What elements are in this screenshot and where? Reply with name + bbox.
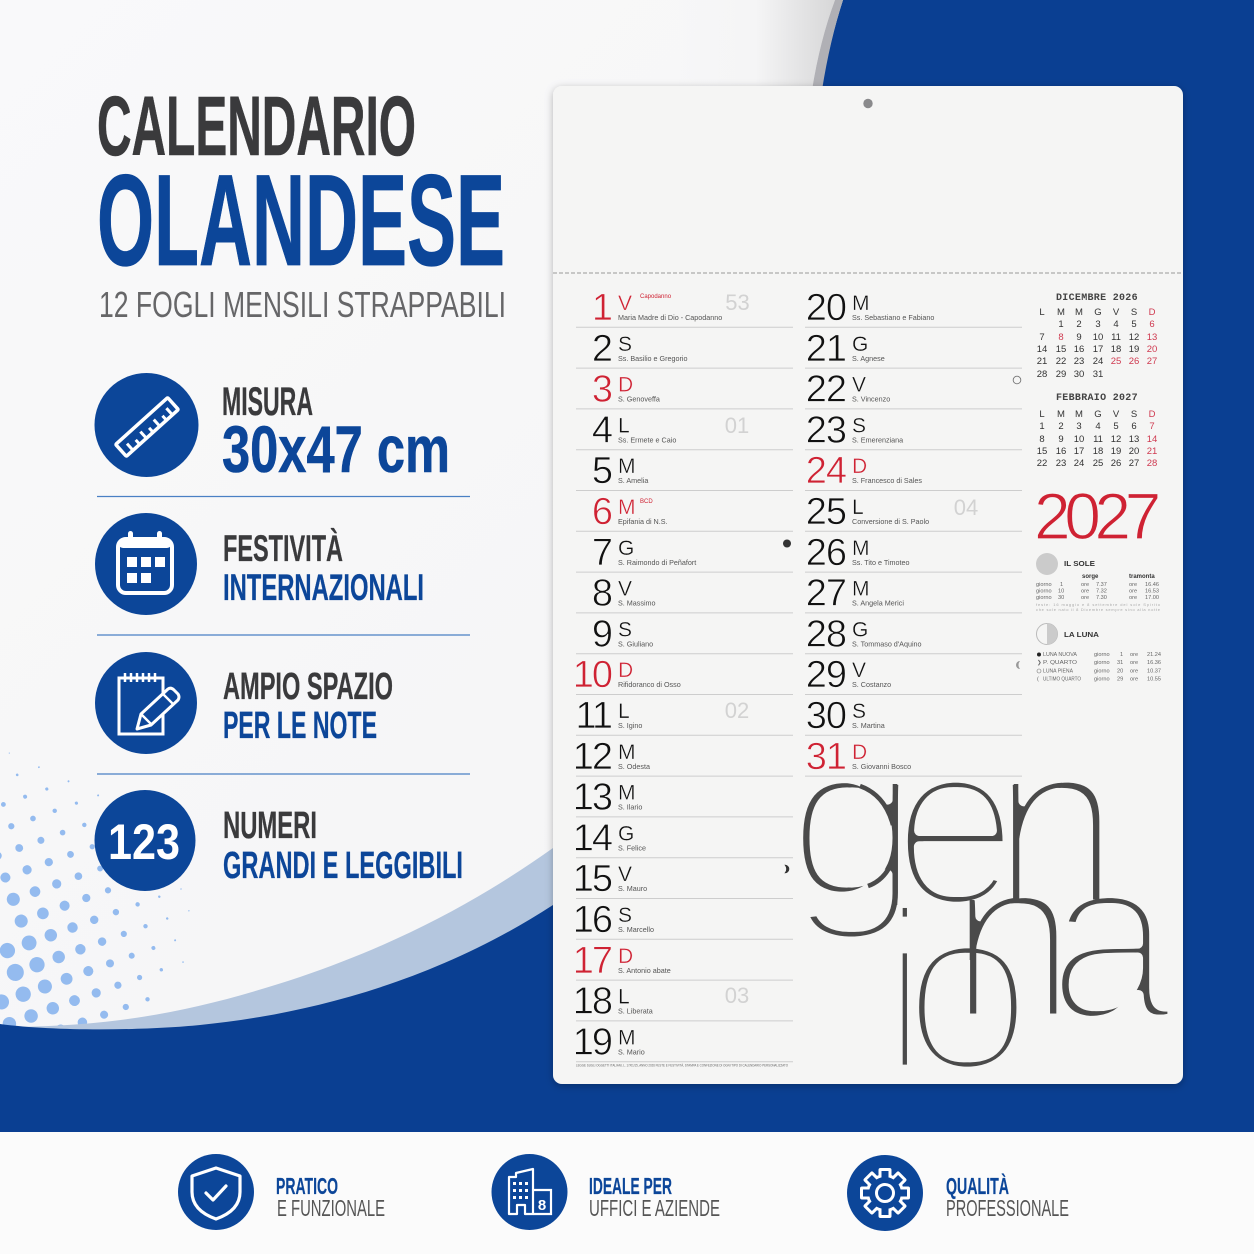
mini calendar: febbraio 2027: 10 bbox=[1074, 434, 1084, 445]
column 1: days 1-19: L bbox=[618, 986, 630, 1009]
feature: numeri: NUMERI bbox=[223, 805, 317, 847]
moon info: 21.24 bbox=[1147, 652, 1161, 658]
sun info: giorno bbox=[1036, 582, 1052, 588]
column 1: days 1-19: 17 bbox=[573, 940, 612, 982]
column 1: days 1-19: 2 bbox=[592, 328, 612, 370]
week numbers: 53 bbox=[725, 290, 750, 315]
column 1: days 1-19: G bbox=[618, 537, 634, 560]
footnote: LEGGE SUGLI OGGETTI ITALIANI, L. 17/01/15, ANNO 2026 FESTE E FESTIVITÀ, STAMPA E CONFEZIONE DI OGNI TIPO DI CALENDARIO PERSONALIZZATO bbox=[576, 1064, 788, 1068]
mini calendar: dicembre 2026: 29 bbox=[1056, 369, 1066, 380]
halftone dots bbox=[0, 714, 215, 1054]
mini calendar: dicembre 2026: S bbox=[1131, 307, 1137, 318]
sun info: 10 bbox=[1058, 588, 1064, 594]
column 1: days 1-19: S. Marcello bbox=[618, 925, 654, 934]
mini calendar: febbraio 2027: M bbox=[1075, 409, 1083, 420]
column 2: days 20-31: D bbox=[852, 741, 867, 764]
mini calendar: dicembre 2026: 6 bbox=[1149, 319, 1155, 330]
sun info: giorno bbox=[1036, 588, 1052, 594]
column 1: days 1-19: V bbox=[618, 292, 632, 315]
moon info: ore bbox=[1130, 660, 1138, 666]
moon info: 10.55 bbox=[1147, 676, 1161, 682]
mini calendar: febbraio 2027: 18 bbox=[1093, 446, 1103, 457]
mini calendar: febbraio 2027: 11 bbox=[1093, 434, 1103, 445]
mini calendar: dicembre 2026: V bbox=[1113, 307, 1120, 318]
column 2: days 20-31: 26 bbox=[806, 532, 846, 574]
column 1: days 1-19: S bbox=[618, 904, 632, 927]
feature: numeri bbox=[94, 790, 463, 891]
column 1: days 1-19: 16 bbox=[573, 899, 612, 941]
moon info: 29 bbox=[1117, 676, 1123, 682]
moon info: LA LUNA bbox=[1064, 632, 1099, 639]
sun info: che sole nato il 8 Dicembre sempre sino alla notte bbox=[1036, 607, 1161, 612]
sun info: ore bbox=[1129, 582, 1137, 588]
column 1: days 1-19: S. Liberata bbox=[618, 1007, 653, 1016]
sun info: 7.32 bbox=[1096, 588, 1107, 594]
column 1: days 1-19: S. Odesta bbox=[618, 762, 650, 771]
mini calendar: dicembre 2026: 19 bbox=[1129, 344, 1139, 355]
column 2: days 20-31: S bbox=[852, 700, 866, 723]
feature: note: AMPIO SPAZIO bbox=[223, 666, 393, 708]
sun info: 16.46 bbox=[1145, 582, 1159, 588]
year: 2027 bbox=[1034, 479, 1159, 553]
mini calendar: febbraio 2027 bbox=[1037, 393, 1157, 469]
column 1: days 1-19: S. Amelia bbox=[618, 476, 648, 485]
title: 12 FOGLI MENSILI STRAPPABILI bbox=[99, 284, 506, 325]
column 1: days 1-19: Epifania di N.S. bbox=[618, 517, 668, 526]
column 1: days 1-19: 1 bbox=[592, 287, 612, 329]
mini calendar: febbraio 2027: 9 bbox=[1058, 434, 1064, 445]
moon info: ore bbox=[1130, 668, 1138, 674]
moon info: giorno bbox=[1094, 668, 1110, 674]
column 1: days 1-19: Rifidoranco di Osso bbox=[618, 680, 681, 689]
column 1: days 1-19: S. Igino bbox=[618, 721, 642, 730]
feature: festività: INTERNAZIONALI bbox=[223, 567, 424, 608]
mini calendar: dicembre 2026: D bbox=[1149, 307, 1156, 318]
mini calendar: febbraio 2027: 17 bbox=[1074, 446, 1084, 457]
moon info: ( bbox=[1037, 676, 1039, 682]
sun info: giorno bbox=[1036, 595, 1052, 601]
column 2: days 20-31: Ss. Tito e Timoteo bbox=[852, 558, 910, 567]
sun info: 30 bbox=[1058, 595, 1064, 601]
column 1: days 1-19: 6 bbox=[592, 491, 612, 533]
column 2: days 20-31 bbox=[806, 287, 934, 778]
column 2: days 20-31: S. Tommaso d'Aquino bbox=[852, 639, 922, 648]
column 1: days 1-19: M bbox=[618, 741, 636, 764]
column 2: days 20-31: 27 bbox=[806, 573, 846, 615]
feature: misura bbox=[94, 373, 450, 486]
column 1: days 1-19: 9 bbox=[592, 613, 612, 655]
column 1: days 1-19: S. Ilario bbox=[618, 803, 642, 812]
mini calendar: dicembre 2026: G bbox=[1094, 307, 1102, 318]
feature: festività: FESTIVITÀ bbox=[223, 528, 343, 569]
column 1: days 1-19: D bbox=[618, 659, 633, 682]
week numbers: 04 bbox=[954, 495, 978, 520]
mini calendar: febbraio 2027: 7 bbox=[1149, 421, 1155, 432]
title: OLANDESE bbox=[97, 147, 505, 293]
column 1: days 1-19: S. Genoveffa bbox=[618, 395, 660, 404]
column 1: days 1-19: 12 bbox=[573, 736, 612, 778]
column 1: days 1-19: 5 bbox=[592, 450, 612, 492]
column 1: days 1-19: Maria Madre di Dio - Capodanno bbox=[618, 313, 722, 322]
mini calendar: febbraio 2027: 28 bbox=[1147, 458, 1157, 469]
column 2: days 20-31: S. Emerenziana bbox=[852, 435, 903, 444]
mini calendar: dicembre 2026: 30 bbox=[1074, 369, 1084, 380]
month name: gennaio: e bbox=[890, 691, 1021, 956]
moon info: giorno bbox=[1094, 660, 1110, 666]
mini calendar: dicembre 2026: 25 bbox=[1111, 356, 1121, 367]
icon: ruler bbox=[94, 373, 198, 477]
bottom item: uffici: UFFICI E AZIENDE bbox=[589, 1195, 720, 1221]
column 2: days 20-31: S. Vincenzo bbox=[852, 395, 890, 404]
mini calendar: febbraio 2027: 1 bbox=[1039, 421, 1045, 432]
month name: gennaio: n bbox=[946, 807, 1079, 1069]
column 1: days 1-19: M bbox=[618, 1026, 636, 1049]
bottom item: pratico: PRATICO bbox=[276, 1173, 338, 1199]
mini calendar: febbraio 2027: 8 bbox=[1039, 434, 1045, 445]
mini calendar: febbraio 2027: 24 bbox=[1074, 458, 1084, 469]
moon info: 16.36 bbox=[1147, 660, 1161, 666]
column 2: days 20-31: G bbox=[852, 333, 868, 356]
mini calendar: febbraio 2027: G bbox=[1094, 409, 1102, 420]
sun info: tramonta bbox=[1129, 574, 1155, 580]
mini calendar: dicembre 2026: 24 bbox=[1093, 356, 1103, 367]
column 1: days 1-19: M bbox=[618, 496, 636, 519]
column 1: days 1-19: 19 bbox=[573, 1021, 612, 1063]
column 1: days 1-19: S. Antonio abate bbox=[618, 966, 671, 975]
mini calendar: dicembre 2026: 12 bbox=[1129, 332, 1139, 343]
month name: gennaio: o bbox=[900, 856, 1035, 1120]
mini calendar: dicembre 2026: 9 bbox=[1076, 332, 1082, 343]
mini calendar: febbraio 2027: 22 bbox=[1037, 458, 1047, 469]
column 2: days 20-31: M bbox=[852, 292, 870, 315]
column 1: days 1-19: 18 bbox=[573, 981, 612, 1023]
month name: gennaio: a bbox=[1045, 806, 1176, 1069]
mini calendar: dicembre 2026: DICEMBRE 2026 bbox=[1056, 293, 1138, 304]
mini calendar: febbraio 2027: V bbox=[1113, 409, 1120, 420]
mini calendar: febbraio 2027: M bbox=[1057, 409, 1065, 420]
title: CALENDARIO bbox=[97, 79, 416, 173]
mini calendar: dicembre 2026: 20 bbox=[1147, 344, 1157, 355]
mini calendar: dicembre 2026: 3 bbox=[1095, 319, 1101, 330]
column 2: days 20-31: M bbox=[852, 578, 870, 601]
mini calendar: dicembre 2026: 13 bbox=[1147, 332, 1157, 343]
column 1: days 1-19: 4 bbox=[592, 409, 613, 451]
column 1: days 1-19: 8 bbox=[592, 573, 612, 615]
column 2: days 20-31: S. Agnese bbox=[852, 354, 885, 363]
bottom item: uffici: IDEALE PER bbox=[589, 1173, 672, 1199]
mini calendar: dicembre 2026: 23 bbox=[1074, 356, 1084, 367]
column 1: days 1-19: 10 bbox=[573, 654, 612, 696]
bottom item: pratico bbox=[178, 1154, 385, 1230]
grey edge bbox=[812, 0, 843, 90]
column 1: days 1-19: S bbox=[618, 333, 632, 356]
mini calendar: febbraio 2027: 25 bbox=[1093, 458, 1103, 469]
feature: misura: MISURA bbox=[222, 380, 313, 424]
mini calendar: febbraio 2027: 15 bbox=[1037, 446, 1047, 457]
mini calendar: dicembre 2026: 5 bbox=[1131, 319, 1137, 330]
column 1: days 1-19: V bbox=[618, 863, 632, 886]
column 1: days 1-19: S. Felice bbox=[618, 843, 646, 852]
mini calendar: febbraio 2027: 6 bbox=[1131, 421, 1137, 432]
sun info: 1 bbox=[1060, 582, 1063, 588]
column 2: days 20-31: S. Giovanni Bosco bbox=[852, 762, 911, 771]
sun info: IL SOLE bbox=[1064, 561, 1095, 568]
column 2: days 20-31: S. Costanzo bbox=[852, 680, 891, 689]
moon info: LUNA NUOVA bbox=[1043, 652, 1077, 658]
bottom item: pratico: E FUNZIONALE bbox=[277, 1195, 385, 1221]
mini calendar: febbraio 2027: 16 bbox=[1056, 446, 1066, 457]
mini calendar: dicembre 2026: 31 bbox=[1093, 369, 1103, 380]
mini calendar: dicembre 2026 bbox=[1037, 293, 1157, 380]
icon: shield bbox=[178, 1154, 254, 1230]
mini calendar: febbraio 2027: 12 bbox=[1111, 434, 1121, 445]
mini calendar: febbraio 2027: 27 bbox=[1129, 458, 1139, 469]
column 2: days 20-31: S. Francesco di Sales bbox=[852, 476, 922, 485]
bottom band bbox=[0, 1132, 1254, 1254]
title bbox=[97, 79, 506, 325]
column 2: days 20-31: S. Angela Merici bbox=[852, 599, 904, 608]
month name: gennaio: g bbox=[785, 697, 923, 943]
mini calendar: dicembre 2026: 15 bbox=[1056, 344, 1066, 355]
column 2: days 20-31: 28 bbox=[806, 613, 846, 655]
column 1: days 1-19: S. Massimo bbox=[618, 599, 656, 608]
mini calendar: febbraio 2027: 14 bbox=[1147, 434, 1157, 445]
mini calendar: dicembre 2026: 4 bbox=[1113, 319, 1119, 330]
column 2: days 20-31: 25 bbox=[806, 491, 846, 533]
column 1: days 1-19: M bbox=[618, 455, 636, 478]
column 2: days 20-31: M bbox=[852, 537, 870, 560]
moon info: ore bbox=[1130, 652, 1138, 658]
column 1: days 1-19: 11 bbox=[576, 695, 612, 737]
column 2: days 20-31: G bbox=[852, 618, 868, 641]
hanging hole bbox=[863, 99, 873, 108]
sun info: ore bbox=[1081, 588, 1089, 594]
column 1: days 1-19: Ss. Ermete e Caio bbox=[618, 435, 676, 444]
sun info: ore bbox=[1081, 582, 1089, 588]
mini calendar: dicembre 2026: 27 bbox=[1147, 356, 1157, 367]
bottom item: qualità: PROFESSIONALE bbox=[946, 1195, 1069, 1221]
mini calendar: dicembre 2026: 1 bbox=[1058, 319, 1064, 330]
column 1: days 1-19: Capodanno bbox=[640, 294, 672, 300]
feature: festività bbox=[95, 513, 424, 615]
sun info bbox=[1036, 553, 1161, 612]
column 1: days 1-19: 15 bbox=[573, 858, 612, 900]
column 2: days 20-31: S. Martina bbox=[852, 721, 885, 730]
column 2: days 20-31: S bbox=[852, 414, 866, 437]
column 1: days 1-19: D bbox=[618, 945, 633, 968]
mini calendar: dicembre 2026: 26 bbox=[1129, 356, 1139, 367]
moon info: giorno bbox=[1094, 676, 1110, 682]
week numbers: 03 bbox=[725, 983, 749, 1008]
moon info: giorno bbox=[1094, 652, 1110, 658]
column 1: days 1-19: S. Mario bbox=[618, 1047, 645, 1056]
sun info: ore bbox=[1129, 588, 1137, 594]
column 2: days 20-31: L bbox=[852, 496, 864, 519]
mini calendar: febbraio 2027: 4 bbox=[1095, 421, 1101, 432]
column 1: days 1-19: L bbox=[618, 414, 630, 437]
icon: building bbox=[492, 1154, 568, 1230]
mini calendar: dicembre 2026: 21 bbox=[1037, 356, 1047, 367]
mini calendar: dicembre 2026: 2 bbox=[1076, 319, 1082, 330]
moon info: 20 bbox=[1117, 668, 1123, 674]
column 1: days 1-19: 3 bbox=[592, 369, 612, 411]
mini calendar: febbraio 2027: 13 bbox=[1129, 434, 1139, 445]
moon info bbox=[1036, 624, 1161, 682]
bottom item: uffici bbox=[492, 1154, 720, 1230]
sun info: 7.30 bbox=[1096, 595, 1107, 601]
column 2: days 20-31: 22 bbox=[806, 369, 846, 411]
column 2: days 20-31: Ss. Sebastiano e Fabiano bbox=[852, 313, 934, 322]
icon: 123 bbox=[94, 790, 196, 891]
column 1: days 1-19: S. Giuliano bbox=[618, 639, 653, 648]
mini calendar: dicembre 2026: 10 bbox=[1093, 332, 1103, 343]
feature: note: PER LE NOTE bbox=[223, 705, 377, 747]
feature: note bbox=[95, 652, 393, 754]
mini calendar: febbraio 2027: 21 bbox=[1147, 446, 1157, 457]
mini calendar: febbraio 2027: 3 bbox=[1076, 421, 1082, 432]
month name: gennaio: i bbox=[878, 862, 932, 1120]
week numbers: 02 bbox=[725, 698, 749, 723]
icon: 123: 123 bbox=[108, 814, 180, 870]
moon info: 10.37 bbox=[1147, 668, 1161, 674]
column 2: days 20-31: 30 bbox=[806, 695, 846, 737]
mini calendar: febbraio 2027: 23 bbox=[1056, 458, 1066, 469]
column 2: days 20-31: V bbox=[852, 659, 866, 682]
column 1: days 1-19: L bbox=[618, 700, 630, 723]
feature: numeri: GRANDI E LEGGIBILI bbox=[223, 845, 463, 887]
column 2: days 20-31: 24 bbox=[806, 450, 847, 492]
column 1: days 1-19: G bbox=[618, 822, 634, 845]
column 2: days 20-31: 21 bbox=[806, 328, 846, 370]
mini calendar: febbraio 2027: 26 bbox=[1111, 458, 1121, 469]
icon: notepad bbox=[95, 652, 197, 754]
month name: gennaio: n bbox=[989, 690, 1122, 956]
icon: calendar bbox=[95, 513, 197, 615]
mini calendar: febbraio 2027: FEBBRAIO 2027 bbox=[1056, 393, 1138, 404]
sun info: 17.00 bbox=[1145, 595, 1159, 601]
column 1: days 1-19: 14 bbox=[573, 817, 613, 859]
mini calendar: dicembre 2026: 28 bbox=[1037, 369, 1047, 380]
icon: building: 8 bbox=[538, 1197, 546, 1214]
column 1: days 1-19: S. Mauro bbox=[618, 884, 647, 893]
mini calendar: dicembre 2026: 18 bbox=[1111, 344, 1121, 355]
moon info: ❯ bbox=[1037, 659, 1042, 666]
column 1: days 1-19: D bbox=[618, 374, 633, 397]
icon: gear bbox=[847, 1155, 923, 1231]
sun info: sorge bbox=[1082, 574, 1099, 580]
column 1: days 1-19: V bbox=[618, 578, 632, 601]
column 2: days 20-31: 31 bbox=[806, 736, 846, 778]
column 1: days 1-19: BCD bbox=[640, 499, 653, 505]
column 1: days 1-19: M bbox=[618, 782, 636, 805]
moon info: P. QUARTO bbox=[1043, 660, 1078, 666]
mini calendar: dicembre 2026: 11 bbox=[1111, 332, 1121, 343]
panel: calendar sheet bbox=[553, 86, 1183, 1120]
bottom item: qualità bbox=[847, 1155, 1069, 1231]
mini calendar: dicembre 2026: L bbox=[1039, 307, 1045, 318]
mini calendar: dicembre 2026: 8 bbox=[1058, 332, 1064, 343]
column 2: days 20-31: 29 bbox=[806, 654, 846, 696]
moon phases bbox=[783, 376, 1021, 873]
mini calendar: febbraio 2027: 5 bbox=[1113, 421, 1119, 432]
column 1: days 1-19: 13 bbox=[573, 777, 612, 819]
sun info: feste: 16 maggio e 8 settembre del sole Spirito bbox=[1036, 602, 1161, 607]
moon info: 1 bbox=[1120, 652, 1123, 658]
mini calendar: dicembre 2026: 17 bbox=[1093, 344, 1103, 355]
mini calendar: febbraio 2027: S bbox=[1131, 409, 1137, 420]
column 2: days 20-31: 23 bbox=[806, 409, 846, 451]
sun info: ore bbox=[1129, 595, 1137, 601]
column 1: days 1-19 bbox=[573, 287, 722, 1063]
column 2: days 20-31: Conversione di S. Paolo bbox=[852, 517, 929, 526]
bottom item: qualità: QUALITÀ bbox=[946, 1172, 1009, 1199]
column 1: days 1-19: S. Raimondo di Peñafort bbox=[618, 558, 696, 567]
sun info: ore bbox=[1081, 595, 1089, 601]
mini calendar: dicembre 2026: 22 bbox=[1056, 356, 1066, 367]
mini calendar: febbraio 2027: L bbox=[1039, 409, 1045, 420]
moon info: ore bbox=[1130, 676, 1138, 682]
mini calendar: febbraio 2027: 19 bbox=[1111, 446, 1121, 457]
moon info: LUNA PIENA bbox=[1043, 668, 1073, 674]
mini calendar: dicembre 2026: M bbox=[1075, 307, 1083, 318]
moon info: ULTIMO QUARTO bbox=[1043, 676, 1082, 682]
column 2: days 20-31: D bbox=[852, 455, 867, 478]
curved band bbox=[0, 848, 620, 1040]
week numbers: 01 bbox=[725, 413, 749, 438]
mini calendar: dicembre 2026: 16 bbox=[1074, 344, 1084, 355]
column 1: days 1-19: Ss. Basilio e Gregorio bbox=[618, 354, 688, 363]
mini calendar: febbraio 2027: D bbox=[1149, 409, 1156, 420]
mini calendar: dicembre 2026: 14 bbox=[1037, 344, 1047, 355]
mini calendar: dicembre 2026: M bbox=[1057, 307, 1065, 318]
feature: misura: 30x47 cm bbox=[222, 412, 450, 486]
column 2: days 20-31: V bbox=[852, 374, 866, 397]
moon info: 31 bbox=[1117, 660, 1123, 666]
mini calendar: febbraio 2027: 20 bbox=[1129, 446, 1139, 457]
column 1: days 1-19: 7 bbox=[592, 532, 612, 574]
sun info: 7.37 bbox=[1096, 582, 1107, 588]
month name: gennaio bbox=[803, 782, 1168, 1067]
column 2: days 20-31: 20 bbox=[806, 287, 846, 329]
week numbers bbox=[725, 290, 978, 1008]
sun info: 16.53 bbox=[1145, 588, 1159, 594]
column 1: days 1-19: S bbox=[618, 618, 632, 641]
mini calendar: dicembre 2026: 7 bbox=[1039, 332, 1045, 343]
mini calendar: febbraio 2027: 2 bbox=[1058, 421, 1064, 432]
